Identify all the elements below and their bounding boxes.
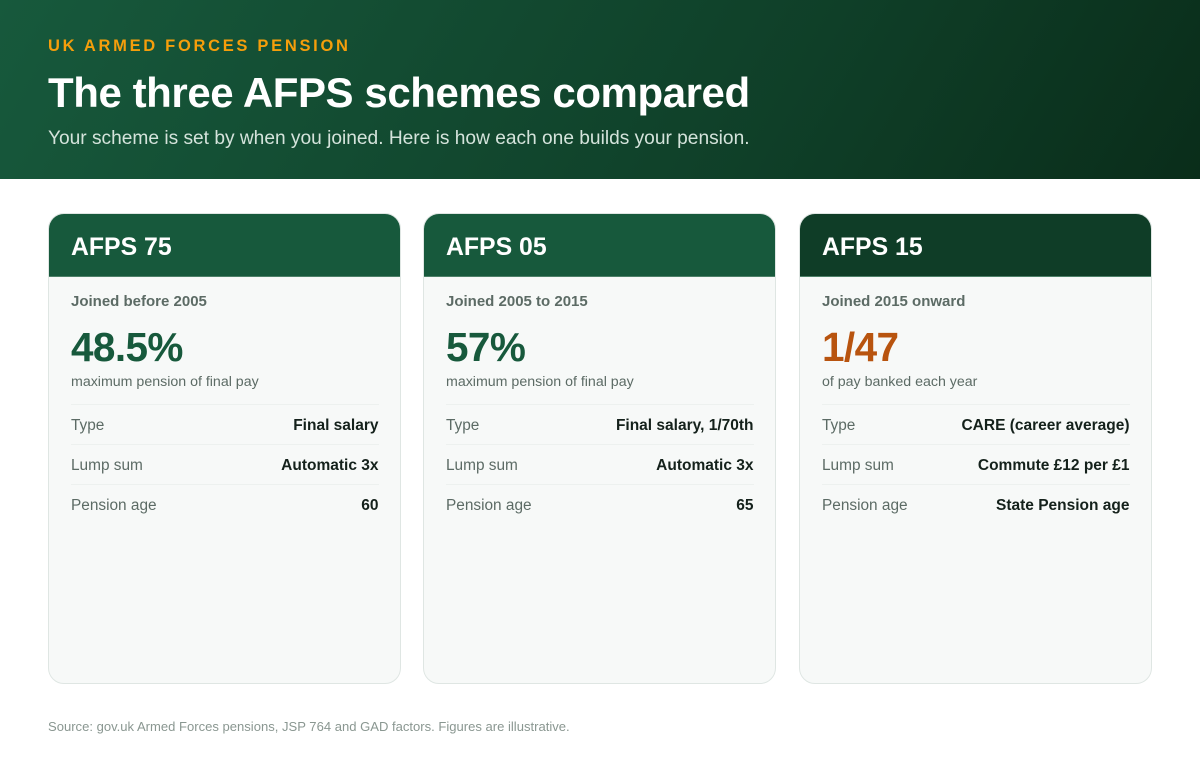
card header: AFPS 05	[424, 214, 775, 277]
row: type: Type	[446, 417, 479, 434]
row: pension age: 65	[736, 497, 754, 514]
row: pension age: Pension age	[71, 497, 157, 514]
key figure caption: maximum pension of final pay	[446, 374, 634, 390]
row: type	[822, 404, 1130, 444]
source note: Source: gov.uk Armed Forces pensions, JSP 764 and GAD factors. Figures are illustrative.	[48, 719, 570, 734]
key figure: 1/47	[822, 324, 898, 370]
card header: AFPS 15	[800, 214, 1151, 277]
eyebrow: UK ARMED FORCES PENSION	[48, 37, 351, 55]
row: type: CARE (career average)	[961, 417, 1130, 434]
row: lump sum	[446, 444, 754, 484]
row: type: Type	[822, 417, 855, 434]
card header: AFPS 75	[49, 214, 400, 277]
row: lump sum: Automatic 3x	[656, 457, 754, 474]
row: lump sum: Lump sum	[822, 457, 894, 474]
row: pension age	[822, 484, 1130, 524]
panel: AFPS 15	[799, 213, 1152, 684]
title: The three AFPS schemes compared	[48, 69, 750, 116]
key figure caption: of pay banked each year	[822, 374, 977, 390]
key figure caption: maximum pension of final pay	[71, 374, 259, 390]
header banner	[0, 0, 1200, 179]
key figure: 57%	[446, 324, 525, 370]
key figure: 48.5%	[71, 324, 183, 370]
row: type: Final salary, 1/70th	[616, 417, 754, 434]
row: pension age	[446, 484, 754, 524]
row: type: Type	[71, 417, 104, 434]
row: lump sum: Lump sum	[446, 457, 518, 474]
row: lump sum: Commute £12 per £1	[978, 457, 1130, 474]
row: type	[446, 404, 754, 444]
row: lump sum	[822, 444, 1130, 484]
panel: AFPS 75	[48, 213, 401, 684]
card header: AFPS 75: AFPS 75	[71, 234, 172, 261]
card header: AFPS 15: AFPS 15	[822, 234, 923, 261]
card header: AFPS 05: AFPS 05	[446, 234, 547, 261]
row: lump sum: Lump sum	[71, 457, 143, 474]
row: pension age: Pension age	[822, 497, 908, 514]
row: pension age: Pension age	[446, 497, 532, 514]
joined date: Joined 2005 to 2015	[446, 293, 588, 310]
row: lump sum: Automatic 3x	[281, 457, 378, 474]
joined date: Joined 2015 onward	[822, 293, 965, 310]
row: pension age	[71, 484, 379, 524]
subtitle: Your scheme is set by when you joined. Here is how each one builds your pension.	[48, 128, 750, 149]
row: pension age: State Pension age	[996, 497, 1130, 514]
joined date: Joined before 2005	[71, 293, 207, 310]
row: pension age: 60	[361, 497, 378, 514]
panel: AFPS 05	[423, 213, 776, 684]
row: lump sum	[71, 444, 379, 484]
row: type	[71, 404, 379, 444]
row: type: Final salary	[293, 417, 378, 434]
